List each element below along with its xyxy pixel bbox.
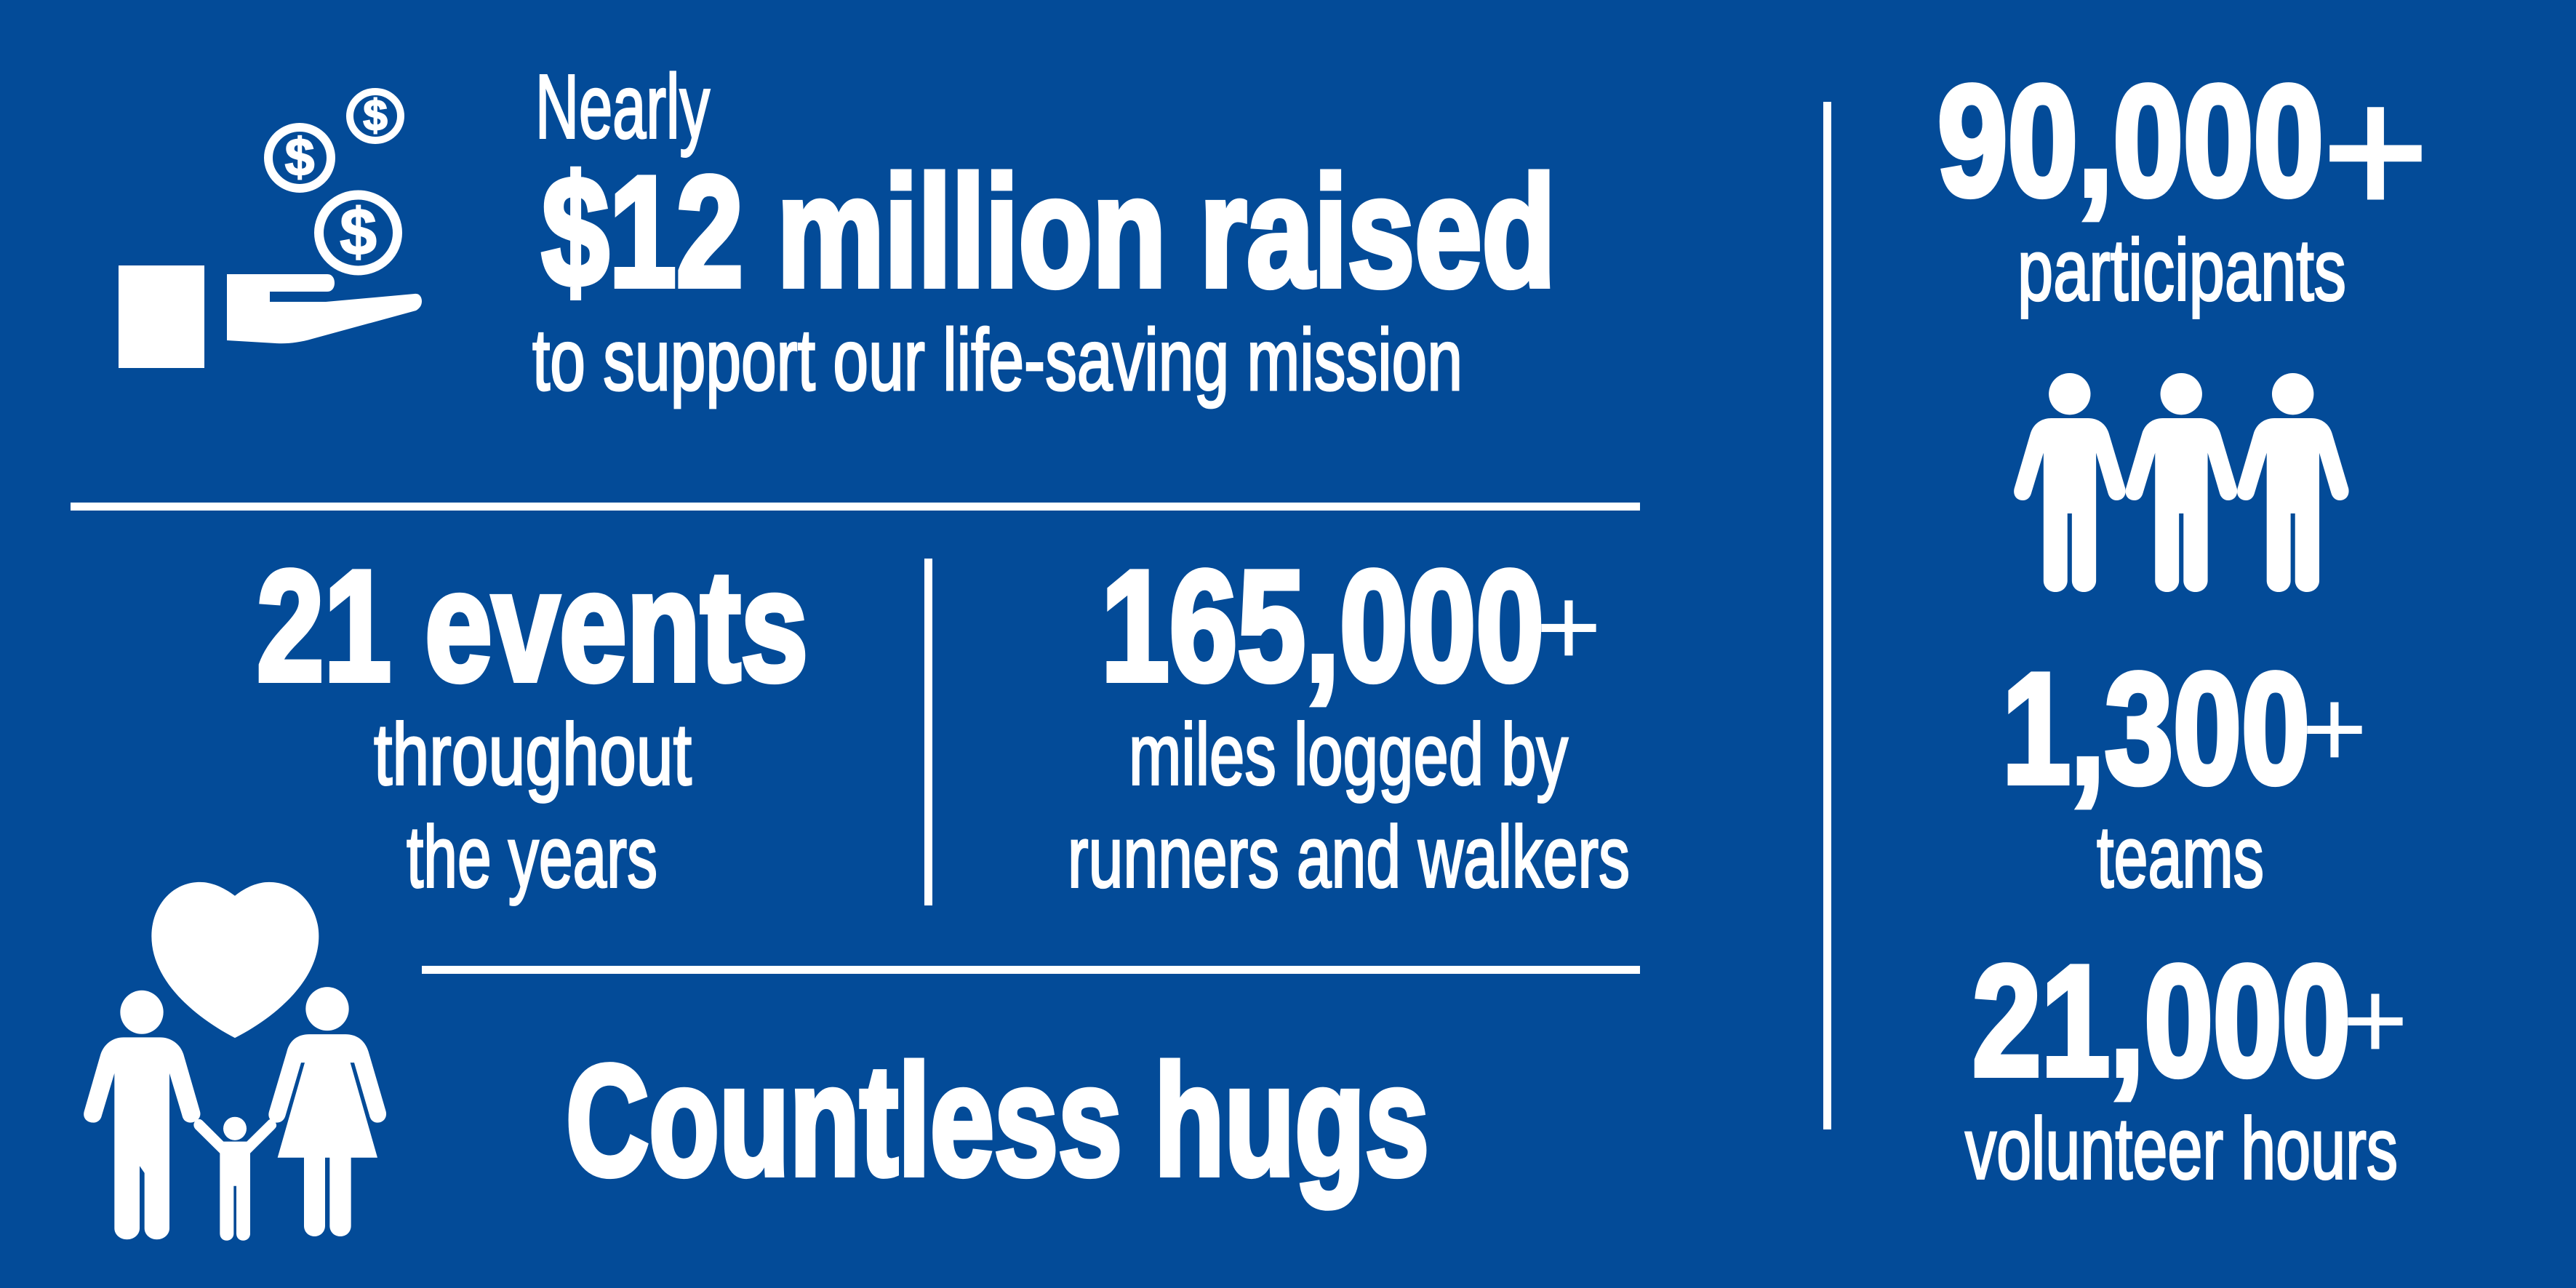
text: runners and walkers: runners and walkers xyxy=(1068,809,1630,906)
icon: heart xyxy=(151,882,319,1038)
text: the years: the years xyxy=(407,809,657,906)
icon: open hand xyxy=(227,274,422,343)
text: nearly: Nearly xyxy=(535,57,710,157)
icon: man xyxy=(84,991,200,1239)
stat: 165,000: 165,000 xyxy=(1101,537,1544,713)
icon: coin large: $ xyxy=(340,196,377,269)
icon: child xyxy=(193,1117,276,1241)
icon: woman xyxy=(268,987,386,1236)
text: participants: participants xyxy=(2017,221,2346,319)
stat: 90,000: 90,000 xyxy=(1937,52,2324,228)
panel: events xyxy=(257,537,808,906)
icon: coin middle: $ xyxy=(285,128,314,187)
heading: countless hugs: Countless hugs xyxy=(566,1032,1429,1208)
text: volunteer hours: volunteer hours xyxy=(1965,1100,2398,1197)
icon: coin middle xyxy=(268,127,331,188)
icon: coin top xyxy=(350,91,401,140)
plus sign: + xyxy=(2323,49,2429,252)
panel: participation stats xyxy=(1937,49,2429,1197)
icon: person left xyxy=(2014,373,2126,592)
text: throughout: throughout xyxy=(374,705,692,803)
icon: hand with coins xyxy=(119,91,422,368)
icon: coin top: $ xyxy=(363,91,388,140)
icon: three people xyxy=(2014,373,2349,592)
stat: 1,300: 1,300 xyxy=(2002,640,2310,816)
stat: 21 events: 21 events xyxy=(257,537,808,713)
icon: family with heart xyxy=(84,882,386,1241)
icon: sleeve cuff xyxy=(119,265,204,368)
icon: person right xyxy=(2237,373,2349,592)
plus sign: + xyxy=(1536,564,1601,689)
panel: miles xyxy=(1068,537,1630,906)
heading: 12 million raised: $12 million raised xyxy=(542,143,1556,319)
text: teams: teams xyxy=(2097,809,2264,906)
plus sign: + xyxy=(2302,665,2367,791)
panel: hugs xyxy=(84,882,1429,1241)
icon: person middle xyxy=(2126,373,2237,592)
panel: money raised xyxy=(119,57,1556,409)
plus sign: + xyxy=(2343,957,2408,1083)
stat: 21,000: 21,000 xyxy=(1972,932,2351,1108)
text: mission line: to support our life-saving mission xyxy=(532,311,1463,409)
text: miles logged by: miles logged by xyxy=(1129,705,1568,803)
icon: coin large xyxy=(319,195,397,271)
